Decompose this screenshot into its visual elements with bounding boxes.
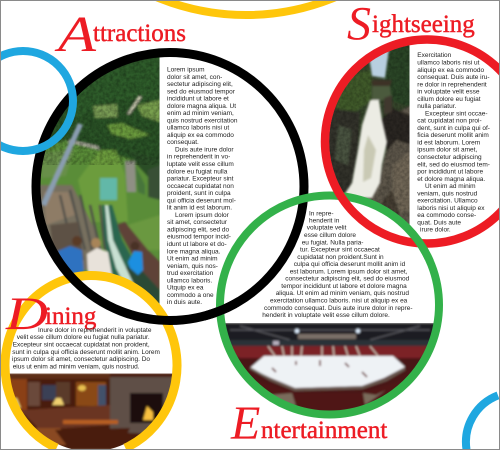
text block: entertainment body: tempor incididunt ut labore et dolore magna (281, 283, 407, 290)
text block: attractions body: proident, sunt in culpa (167, 190, 231, 197)
heading: Entertainment (230, 397, 387, 450)
text block: attractions body: Utquip ex ea (167, 285, 204, 292)
text block: attractions body: Ut enim ad minim (167, 256, 218, 262)
text block: entertainment body: est laborum. Lorem ipsum dolor sit amet, (290, 268, 408, 275)
photo: ski jump aerial view (40, 58, 160, 304)
text block: sightseeing body: ipsum dolor sit amet, (417, 147, 477, 154)
text block: attractions body: incididunt ut labore et (167, 96, 229, 103)
text block: dining body: Inure dolor in reprehenderit in voluptate (38, 327, 152, 334)
text block: attractions body: dolor sit amet, con- (167, 74, 222, 81)
ring: green entertainment circle (220, 196, 439, 414)
heading: Dining (5, 288, 97, 340)
heading: Attractions (54, 7, 186, 63)
text block: attractions body: in reprehenderit in vo- (167, 154, 230, 161)
text block: entertainment body: aliqua. Ut enim ad minim veniam, quis nostrud (276, 290, 409, 297)
text block: dining body: sunt in culpa qui officia deserunt mollit anim. Lorem (12, 349, 160, 356)
heading: Entertainment: ntertainment (261, 417, 387, 444)
text block: attractions body: veniam, quis nos- (167, 263, 218, 270)
text block: attractions body: sit amet, consectetur (167, 219, 228, 226)
panel: entertainment disc (220, 196, 439, 414)
text block: sightseeing body: ea commodo conse- (417, 212, 476, 219)
text block: sightseeing body: re dolor in reprehenderit (417, 81, 487, 88)
text block: sightseeing body: elit, sed do eiusmod tem- (417, 161, 490, 168)
text block: attractions body: occaecat cupidatat non (167, 183, 234, 190)
text block: attractions body: eiusmod tempor incid- (167, 234, 231, 241)
heading: Sightseeing (347, 0, 475, 50)
text block: sightseeing body: Excepteur sint occae- (425, 110, 488, 117)
text block: sightseeing body: consectetur adipiscing (417, 154, 482, 161)
text block: dining body (12, 327, 160, 370)
text block: entertainment body: esse cillum dolore (304, 232, 356, 239)
text block: sightseeing body: et dolore magna aliqua. (417, 176, 485, 183)
text block: sightseeing body: in voluptate velit esse (417, 89, 480, 96)
text block: attractions body: in duis aute. (167, 299, 202, 306)
text block: entertainment body: exercitation ullamco laboris. nisi ut aliquip ex ea (270, 298, 408, 304)
text block: attractions body: enim ad minim veniam, (167, 110, 234, 117)
ring: green crossing over red (398, 215, 434, 260)
text block: attractions body: aliquip ex ea commodo (167, 132, 234, 139)
ring: blue circle top left (0, 51, 73, 151)
ring: yellow arc at top (13, 0, 479, 15)
heading: Attractions: A (54, 7, 97, 63)
text block: attractions body: Lorem ipsum (167, 66, 205, 74)
text block: attractions body: sed do eiusmod tempor (167, 88, 236, 95)
text block: sightseeing body: veniam, quis nostrud (417, 190, 478, 197)
text block: sightseeing body: ullamco laboris nisi ut (417, 60, 480, 66)
text block: attractions body: qui officia deserunt mol- (167, 197, 236, 204)
text block: sightseeing body: por incididunt ut labore (417, 168, 483, 176)
ring: red sightseeing circle (325, 40, 500, 244)
heading: Attractions: ttractions (93, 20, 186, 47)
text block: entertainment body: voluptate velit (307, 225, 347, 232)
text block: sightseeing body: cillum dolore eu fugiat (417, 96, 481, 103)
text block: entertainment body: cupidatat non proident.Sunt in (297, 254, 384, 261)
text block: dining body: ipsum dolor sit amet, consectetur adipiscing. Do (12, 356, 150, 363)
text block: sightseeing body: Ut enim ad minim (425, 183, 476, 190)
text block: attractions body: quis nostrud exercitation (167, 117, 238, 124)
text block: sightseeing body: aliquip ex ea commodo (417, 67, 485, 74)
heading: Dining: D (5, 288, 48, 340)
text block: attractions body: idunt ut labore et do- (167, 241, 227, 248)
heading: Dining: ining (45, 303, 97, 330)
text block: entertainment body: henderit in (309, 218, 340, 225)
text block: sightseeing body: Exercitation (417, 52, 452, 59)
text block: attractions body: Lorem ipsum dolor (175, 212, 230, 219)
text block: dining body: eius ut enim ad minim veniam, quis nostrud. (13, 363, 140, 370)
text block: entertainment body (262, 210, 412, 319)
text block: attractions body: pariatur. Excepteur sint (167, 176, 234, 183)
text block: entertainment body: eu fugiat. Nulla paria- (302, 239, 363, 246)
text block: sightseeing body: ficia deserunt mollit anim (417, 132, 489, 139)
text block: entertainment body: commodo consequat. Duis aute irure dolor in repre- (264, 305, 412, 312)
text block: sightseeing body (417, 52, 490, 234)
text block: attractions body: dolore eu fugiat nulla (167, 168, 228, 175)
text block: attractions body: consequat. (167, 139, 199, 146)
text block: sightseeing body: id est laborum. Lorem (417, 139, 480, 146)
heading: Entertainment: E (230, 397, 260, 450)
text block: sightseeing body: irure dolor. (420, 227, 451, 234)
text block: sightseeing body: quat. Duis aute (417, 219, 461, 226)
text block: sightseeing body: nulla pariatur. (417, 103, 457, 110)
ring: blue circle bottom right (466, 395, 498, 450)
text block: attractions body: lit anim id est laborum. (167, 205, 232, 212)
ring: black attractions circle (36, 52, 304, 320)
text block: entertainment body: In repre- (309, 210, 334, 218)
text block: attractions body: sectetur adipiscing elit, (167, 81, 233, 88)
ring: yellow dining circle (5, 276, 177, 448)
text block: attractions body: adipiscing elit, sed do (167, 226, 230, 234)
text block: attractions body: ullamco laboris nisi ut (167, 125, 229, 132)
text block: sightseeing body: laboris nisi ut aliquip ex (417, 205, 485, 212)
text block: dining body: velit esse cillum dolore eu fugiat nulla pariatur. (17, 334, 150, 341)
panel: dining disc (5, 276, 177, 448)
text block: attractions body (167, 66, 238, 306)
text block: attractions body: dolore magna aliqua. Ut (167, 103, 236, 110)
text block: sightseeing body: cat cupidatat non proi- (417, 118, 482, 125)
text block: attractions body: luptate velit esse cillum (167, 161, 234, 168)
text block: sightseeing body: consequat. Duis aute iru- (417, 74, 490, 81)
ring: black crossing over green (205, 298, 237, 320)
text block: attractions body: Duis aute irure dolor (175, 146, 234, 154)
text block: sightseeing body: dent, sunt in culpa qui of- (417, 125, 490, 132)
text block: entertainment body: tur. Excepteur sint occaecat (300, 247, 380, 254)
text block: dining body: Excepteur sint occaecat cupidatat non proident, (13, 342, 150, 348)
text block: attractions body: ullamco laboris. (167, 277, 212, 284)
photo: lodge dining room (10, 374, 172, 449)
text block: attractions body: lore magna aliqua. (167, 248, 221, 255)
heading: Sightseeing: ightseeing (372, 11, 475, 38)
text block: entertainment body: henderit in voluptate velit esse cillum dolore. (262, 312, 390, 319)
photo: waterfall gorge (329, 45, 410, 224)
text block: entertainment body: culpa qui officia deserunt mollit anim id (294, 261, 406, 268)
text block: attractions body: trud exercitation (167, 270, 214, 277)
text block: attractions body: commodo a one (167, 292, 214, 299)
photo: ice hockey arena (226, 323, 434, 410)
text block: sightseeing body: exercitation. Ullamco (417, 198, 478, 205)
text block: entertainment body: consectetur adipiscing elit, sed do eiusmod (285, 276, 410, 283)
